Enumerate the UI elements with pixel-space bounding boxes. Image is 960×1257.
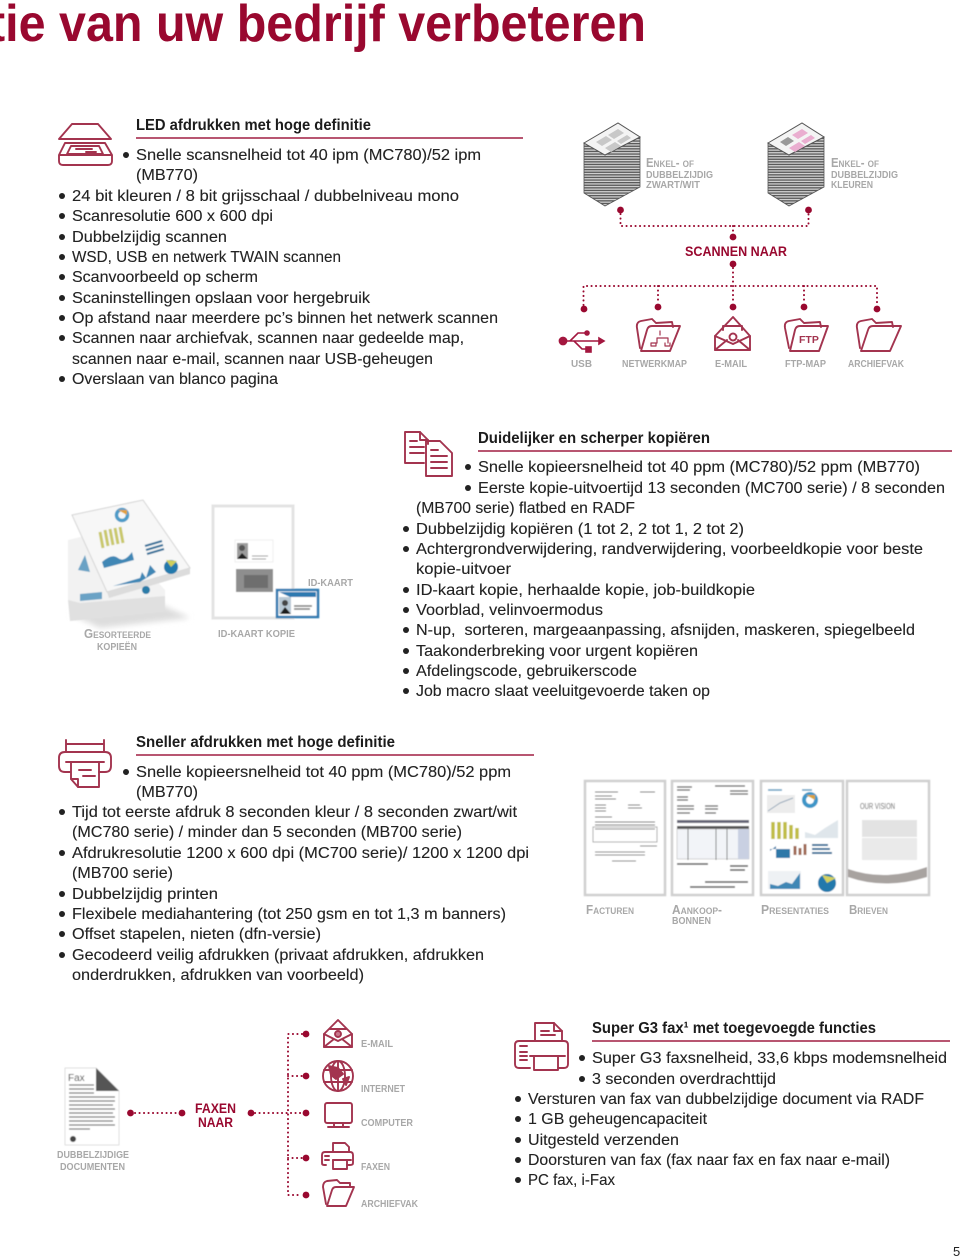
bullet list: kopieren: N-up, sorteren, margeaanpassing, afsnijden, maskeren, spiegelbeeld [416,622,915,639]
bullet list: kopieren: Snelle kopieersnelheid tot 40 ppm (MC780)/52 ppm (MB770) [478,459,920,476]
labels: bestemmingen: FTP-MAP [785,358,826,370]
heading: kopieren: Duidelijker en scherper kopiëren [478,430,710,447]
bullet list: fax: PC fax, i-Fax [528,1172,615,1189]
bullet list: afdrukken: onderdrukken, afdrukken van voorbeeld) [72,967,364,984]
labels: bestemmingen: USB [571,358,592,370]
bullet list: afdrukken: Dubbelzijdig printen [72,886,218,903]
panel: kopieren tekst [403,430,952,700]
bullet list: afdrukken: (MB700 serie) [72,865,173,882]
bullet list: fax: 1 GB geheugencapaciteit [528,1111,708,1128]
label: gesorteerde kopieen: KOPIEËN [97,640,137,653]
image: factuur [585,781,665,895]
bullet list: scannen: Op afstand naar meerdere pc’s binnen het netwerk scannen [72,310,498,327]
bullet list: scannen [59,147,498,388]
connector: bronnen naar scannen [617,207,812,240]
bullet list: scannen: WSD, USB en netwerk TWAIN scannen [72,249,341,266]
icon: ftp-map [785,319,828,351]
labels: fax bestemmingen: ARCHIEFVAK [361,1198,418,1210]
labels: bestemmingen [571,358,904,370]
panel: kopie voorbeelden [68,500,354,653]
heading: super g3 fax: Super G3 fax¹ met toegevoegde functies [592,1020,876,1037]
image: id-kaart kopie [213,506,318,618]
icon: usb [559,331,604,352]
bullet list: fax: Doorsturen van fax (fax naar fax en fax naar e-mail) [528,1152,890,1169]
icon: archiefvak [857,319,901,351]
heading: scannen naar: SCANNEN NAAR [685,244,787,259]
bullet list: scannen: Scanvoorbeeld op scherm [72,269,258,286]
panel: fax tekst [515,1020,950,1189]
bullet list: kopieren: Afdelingscode, gebruikerscode [416,663,637,680]
bullet list: fax: Versturen van fax van dubbelzijdige document via RADF [528,1091,924,1108]
icon: e-mail [324,1020,352,1047]
image: fax document: Fax [68,1073,85,1084]
bullet list: afdrukken: (MC780 serie) / minder dan 5 seconden (MB700 serie) [72,824,462,841]
labels: documenten: Aankoop- [672,903,722,917]
bullet list: afdrukken: Tijd tot eerste afdruk 8 seconden kleur / 8 seconden zwart/wit [72,804,518,821]
labels: fax bestemmingen: FAXEN [361,1161,390,1173]
bullet list: kopieren: Job macro slaat veeluitgevoerde taken op [416,683,710,700]
bullet list: kopieren: Eerste kopie-uitvoertijd 13 seconden (MC700 serie) / 8 seconden [478,480,945,497]
bullet list: kopieren: Taakonderbreking voor urgent kopiëren [416,643,698,660]
bullet list: fax [515,1050,947,1189]
labels: bestemmingen: NETWERKMAP [622,358,687,370]
icon: archiefvak [323,1180,354,1206]
labels: documenten [586,903,888,927]
bullet list: kopieren: kopie-uitvoer [416,561,512,578]
labels: fax bestemmingen: COMPUTER [361,1117,413,1129]
icon: faxapparaat [322,1143,353,1169]
bullet list: kopieren: Achtergrondverwijdering, randverwijdering, voorbeeldkopie voor beste [416,541,923,558]
label: dubbelzijdige documenten: DOCUMENTEN [60,1161,125,1173]
bullet list: afdrukken: Offset stapelen, nieten (dfn-versie) [72,926,321,943]
heading: sneller afdrukken: Sneller afdrukken met hoge definitie [136,734,395,751]
label: id-kaart kopie: ID-KAART KOPIE [218,628,295,640]
bullet list: scannen: Snelle scansnelheid tot 40 ipm (MC780)/52 ipm [136,147,481,164]
label: gesorteerde kopieen [84,627,151,653]
bullet list: afdrukken: Flexibele mediahantering (tot 250 gsm en tot 1,3 m banners) [72,906,506,923]
connector: scannen naar bestemmingen [581,261,880,312]
bullet list: scannen: Scannen naar archiefvak, scannen naar gedeelde map, [72,330,464,347]
bullet list: kopieren [403,459,945,700]
heading: faxen naar [195,1101,236,1130]
heading: faxen naar: NAAR [198,1115,233,1130]
icon: ftp-map: FTP [799,334,819,346]
icon: fax [515,1023,568,1070]
label: enkel- of dubbelzijdig zwart/wit: DUBBELZIJDIG [646,169,713,181]
panel: documentvoorbeelden [585,781,929,927]
panel: scannen tekst [59,117,523,388]
label: dubbelzijdige documenten: DUBBELZIJDIGE [57,1149,129,1161]
label: enkel- of dubbelzijdig zwart/wit [646,156,713,191]
bullet list: scannen: Overslaan van blanco pagina [72,371,278,388]
connector: document naar faxen [127,1110,185,1116]
icon: stapel zwart/wit [584,123,640,206]
panel: afdrukken tekst [59,734,534,984]
labels: bestemmingen: E-MAIL [715,358,748,370]
image: presentatie [761,781,843,895]
bullet list: scannen: 24 bit kleuren / 8 bit grijsschaal / dubbelniveau mono [72,188,459,205]
label: enkel- of dubbelzijdig zwart/wit: ZWART/WIT [646,179,701,191]
bullet list: kopieren: Dubbelzijdig kopiëren (1 tot 2, 2 tot 1, 2 tot 2) [416,521,744,538]
bullet list: afdrukken [59,764,529,984]
label: gesorteerde kopieen: Gesorteerde [84,627,151,641]
bullet list: afdrukken: Afdrukresolutie 1200 x 600 dpi (MC700 serie)/ 1200 x 1200 dpi [72,845,529,862]
bullet list: scannen: (MB770) [136,167,198,184]
bullet list: fax: 3 seconden overdrachttijd [592,1071,776,1088]
bullet list: fax: Uitgesteld verzenden [528,1132,679,1149]
label: enkel- of dubbelzijdig kleuren [831,156,898,191]
heading: faxen naar: FAXEN [195,1101,236,1116]
image: gesorteerde kopieen [68,500,190,628]
panel: faxen naar diagram [57,1020,418,1210]
labels: fax bestemmingen [361,1038,418,1210]
icon: documenten [405,432,452,476]
icon: stapel kleuren [768,123,824,206]
bullet list: kopieren: (MB700 serie) flatbed en RADF [416,500,635,517]
bullet list: scannen: Dubbelzijdig scannen [72,229,227,246]
label: enkel- of dubbelzijdig kleuren: KLEUREN [831,179,873,191]
image: fax document [65,1068,119,1145]
icon: scanner [59,124,112,165]
labels: documenten: Presentaties [761,903,829,917]
icon: internet [323,1061,353,1091]
bullet list: kopieren: Voorblad, velinvoermodus [416,602,603,619]
label: id-kaart: ID-KAART [308,577,354,589]
bullet list: afdrukken: Gecodeerd veilig afdrukken (privaat afdrukken, afdrukken [72,947,484,964]
label: enkel- of dubbelzijdig zwart/wit: Enkel- of [646,156,694,170]
labels: documenten: Brieven [849,903,888,917]
icon: printer [59,740,111,787]
icon: e-mail [715,317,750,350]
icon: computer [325,1103,352,1127]
bullet list: afdrukken: (MB770) [136,784,198,801]
label: enkel- of dubbelzijdig kleuren: DUBBELZIJDIG [831,169,898,181]
bullet list: kopieren: ID-kaart kopie, herhaalde kopie, job-buildkopie [416,582,755,599]
label: enkel- of dubbelzijdig kleuren: Enkel- of [831,156,879,170]
bullet list: scannen: Scanresolutie 600 x 600 dpi [72,208,273,225]
icon: netwerkmap [637,319,680,351]
label: dubbelzijdige documenten [57,1149,129,1173]
labels: fax bestemmingen: E-MAIL [361,1038,394,1050]
bullet list: afdrukken: Snelle kopieersnelheid tot 40 ppm (MC780)/52 ppm [136,764,511,781]
bullet list: fax: Super G3 faxsnelheid, 33,6 kbps modemsnelheid [592,1050,947,1067]
image: brief: OUR VISION [860,801,895,811]
bullet list: scannen: Scaninstellingen opslaan voor hergebruik [72,290,371,307]
labels: documenten: BONNEN [672,915,711,927]
bullet list: scannen: scannen naar e-mail, scannen naar USB-geheugen [72,351,433,368]
labels: bestemmingen: ARCHIEFVAK [848,358,904,370]
labels: fax bestemmingen: INTERNET [361,1083,405,1095]
labels: documenten: Facturen [586,903,634,917]
connector: faxen naar bestemmingen [248,1031,309,1198]
image: brief [847,781,929,895]
panel: scannen naar diagram [559,123,904,370]
image: aankoopbon [672,781,753,895]
heading: LED afdrukken: LED afdrukken met hoge definitie [136,117,371,134]
